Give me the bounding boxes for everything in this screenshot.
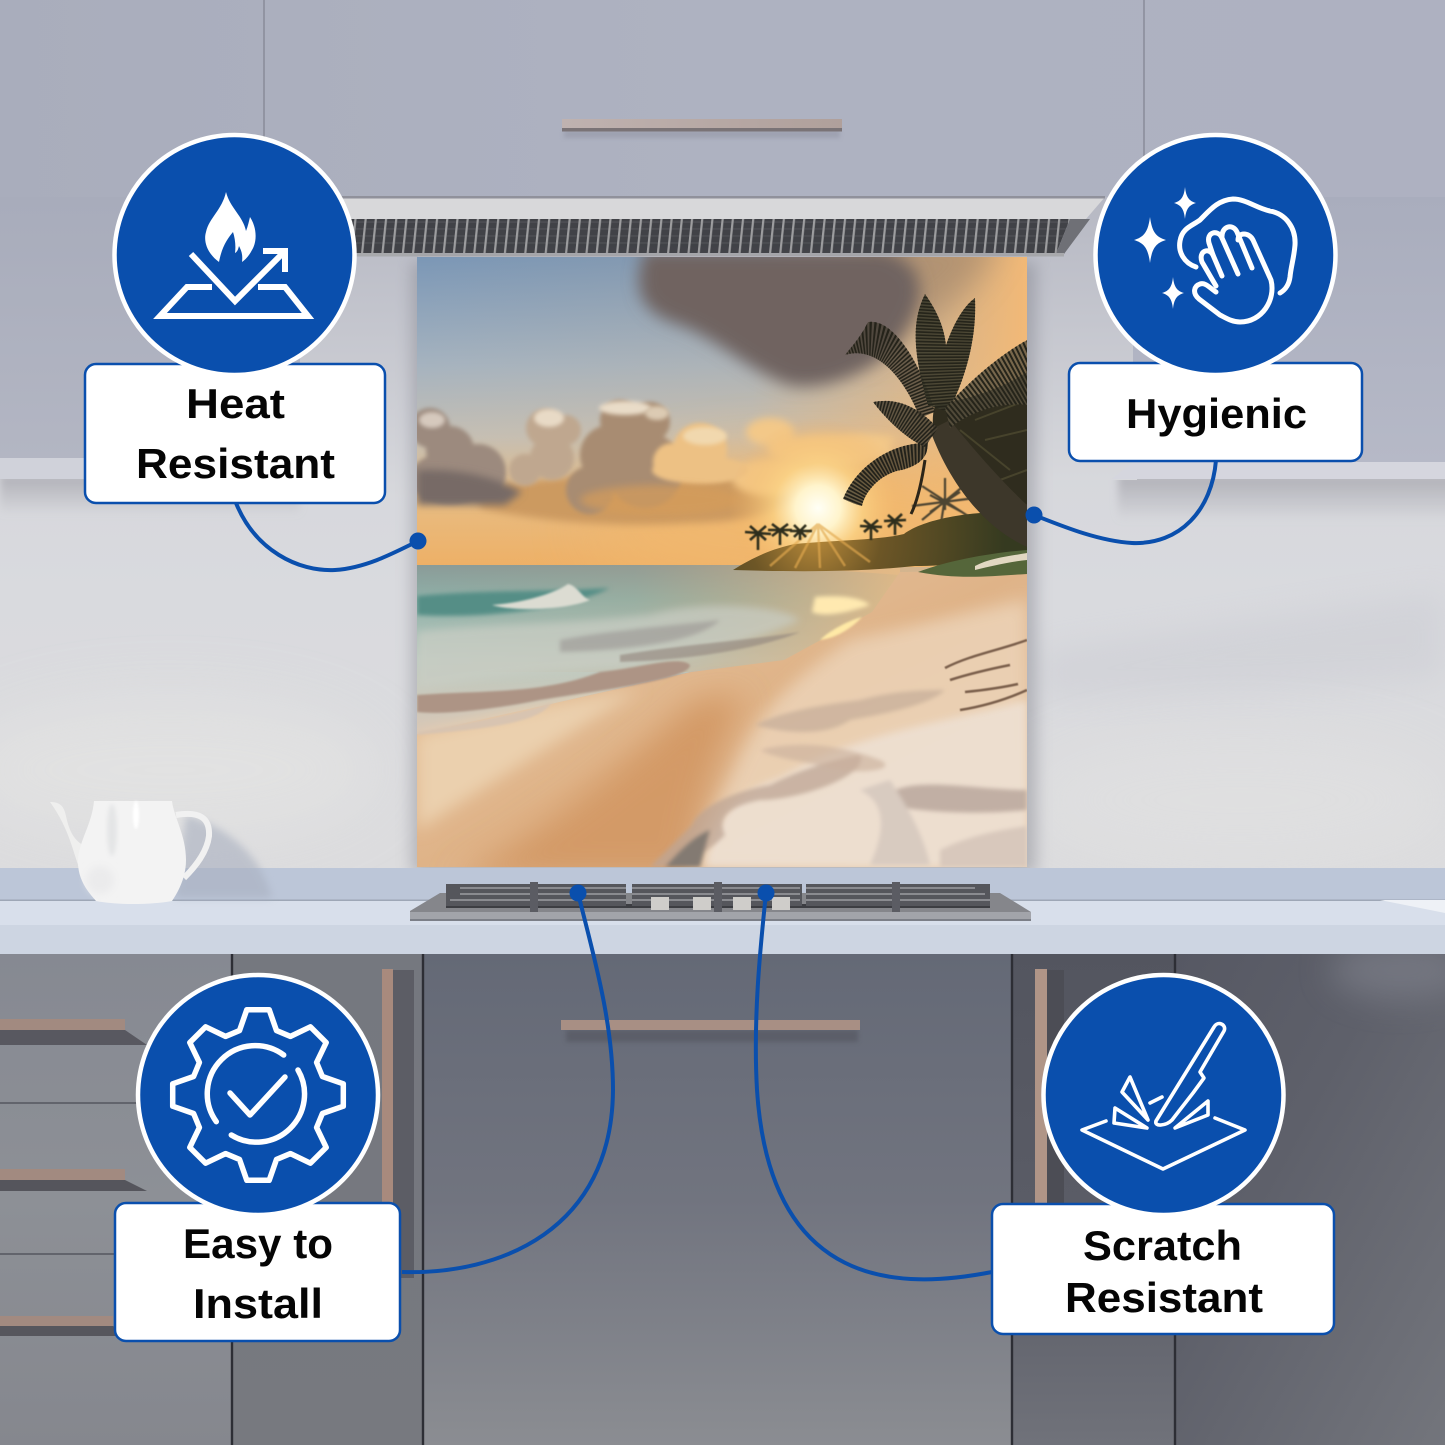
sea <box>417 565 900 735</box>
upper cabinet left underside <box>0 458 300 479</box>
foam line <box>417 661 690 713</box>
small palm behind <box>911 477 969 522</box>
sky <box>417 257 936 567</box>
callout: easy to install <box>115 975 400 1341</box>
countertop <box>0 868 1445 954</box>
handle <box>176 814 209 878</box>
grates <box>446 884 990 906</box>
callout: hygienic <box>1069 135 1362 461</box>
teal wave <box>417 588 610 616</box>
callout: heat resistant <box>85 135 385 503</box>
tiny palms <box>745 514 906 550</box>
icon circle <box>114 135 354 375</box>
connector: easy to install <box>402 884 613 1272</box>
upper side cabinet left <box>0 197 300 460</box>
gas hob <box>410 882 1031 921</box>
centre handle <box>561 1020 860 1042</box>
drawer handles <box>0 1019 147 1336</box>
hob plate <box>410 893 1031 921</box>
label text: Heat <box>186 380 285 427</box>
upper cabinet right underside <box>1112 462 1445 479</box>
vertical handle left <box>382 969 414 1278</box>
door left <box>232 954 423 1445</box>
upper side cabinet right <box>1133 197 1445 462</box>
counter backsplash zone <box>0 868 1445 901</box>
footprints and shadows in sand <box>650 690 1027 867</box>
label text: Install <box>193 1280 323 1327</box>
middle tower <box>509 409 581 486</box>
teapot <box>50 801 272 904</box>
seaweed <box>945 640 1027 710</box>
connector: heat resistant <box>236 503 426 570</box>
frond left <box>873 401 938 447</box>
label text <box>183 1220 333 1327</box>
sand <box>417 570 1027 867</box>
cumulus clouds <box>410 400 896 525</box>
upper cabinets <box>0 0 1445 197</box>
beach splashback panel <box>417 257 1027 867</box>
foliage mass <box>933 372 1027 505</box>
connector: scratch resistant <box>756 884 992 1279</box>
icon: flame over surface <box>160 192 308 316</box>
door centre <box>423 954 1012 1445</box>
sun reflection <box>812 596 870 614</box>
left cloud <box>410 408 506 504</box>
warm haze <box>726 431 962 572</box>
island <box>733 512 1027 577</box>
spout <box>50 802 88 876</box>
wall gap right of panel <box>1027 197 1137 480</box>
body <box>78 801 186 904</box>
sun glow <box>740 428 878 549</box>
label box <box>115 1203 400 1341</box>
sunlit puff <box>652 423 748 484</box>
drawer bank <box>0 954 232 1445</box>
lower cabinets <box>0 940 1445 1445</box>
grass <box>918 550 1027 577</box>
label box <box>85 364 385 503</box>
frond lower left <box>843 443 930 506</box>
hood strip <box>340 197 1105 219</box>
icon circle <box>138 975 378 1215</box>
low warm cloud band <box>480 473 801 525</box>
label text: Resistant <box>1065 1274 1263 1321</box>
trunk <box>930 420 1027 547</box>
label text: Hygienic <box>1126 390 1307 437</box>
thin trunk <box>911 460 925 514</box>
icon: knife scratching surface <box>1082 1024 1245 1169</box>
main cloud <box>566 400 683 514</box>
wall <box>0 257 1445 869</box>
frond right <box>945 340 1035 428</box>
storm cloud warm edge <box>890 257 1005 344</box>
frond crown <box>916 285 975 420</box>
shadows under cabinets <box>0 475 1445 521</box>
door right <box>1012 954 1175 1445</box>
counter front <box>0 925 1445 954</box>
icon circle <box>1096 135 1336 375</box>
sea waves <box>417 584 870 735</box>
icon circle <box>1044 975 1284 1215</box>
cabinet seams <box>232 954 1175 1445</box>
counter top <box>0 901 1445 925</box>
hood vent <box>340 219 1070 254</box>
upper cabinet handle <box>562 119 842 138</box>
label text: Scratch <box>1083 1222 1242 1269</box>
pale sand <box>417 690 640 830</box>
frond upper left <box>845 322 935 420</box>
icon: hand wiping with sparkles <box>1134 187 1295 322</box>
wave crest <box>492 584 590 609</box>
far bright clouds <box>732 418 896 496</box>
icon: gear with check <box>173 1010 343 1180</box>
wall gap left of panel <box>300 197 418 497</box>
label text: Easy to <box>183 1220 333 1267</box>
storm cloud <box>639 250 919 386</box>
vertical handle right <box>1035 969 1064 1210</box>
door far right <box>1175 954 1445 1445</box>
label text <box>136 380 335 487</box>
connector: hygienic <box>1026 460 1216 543</box>
wet sand shade <box>450 695 745 880</box>
cabinet seams <box>264 0 1144 197</box>
label box <box>992 1204 1334 1334</box>
teapot shadow <box>175 815 272 898</box>
panel shadow on wall <box>412 262 1036 874</box>
palm tree <box>843 285 1035 547</box>
foliage highlights <box>960 400 1027 480</box>
bright sand right <box>690 600 1027 867</box>
range hood <box>340 196 1105 256</box>
wall light patches <box>0 590 1445 860</box>
knobs <box>651 897 790 910</box>
fronds <box>843 285 1035 506</box>
label text: Resistant <box>136 440 335 487</box>
callout: scratch resistant <box>992 975 1334 1334</box>
label box <box>1069 363 1362 461</box>
sun rays on island <box>770 524 870 568</box>
label text <box>1065 1222 1263 1321</box>
